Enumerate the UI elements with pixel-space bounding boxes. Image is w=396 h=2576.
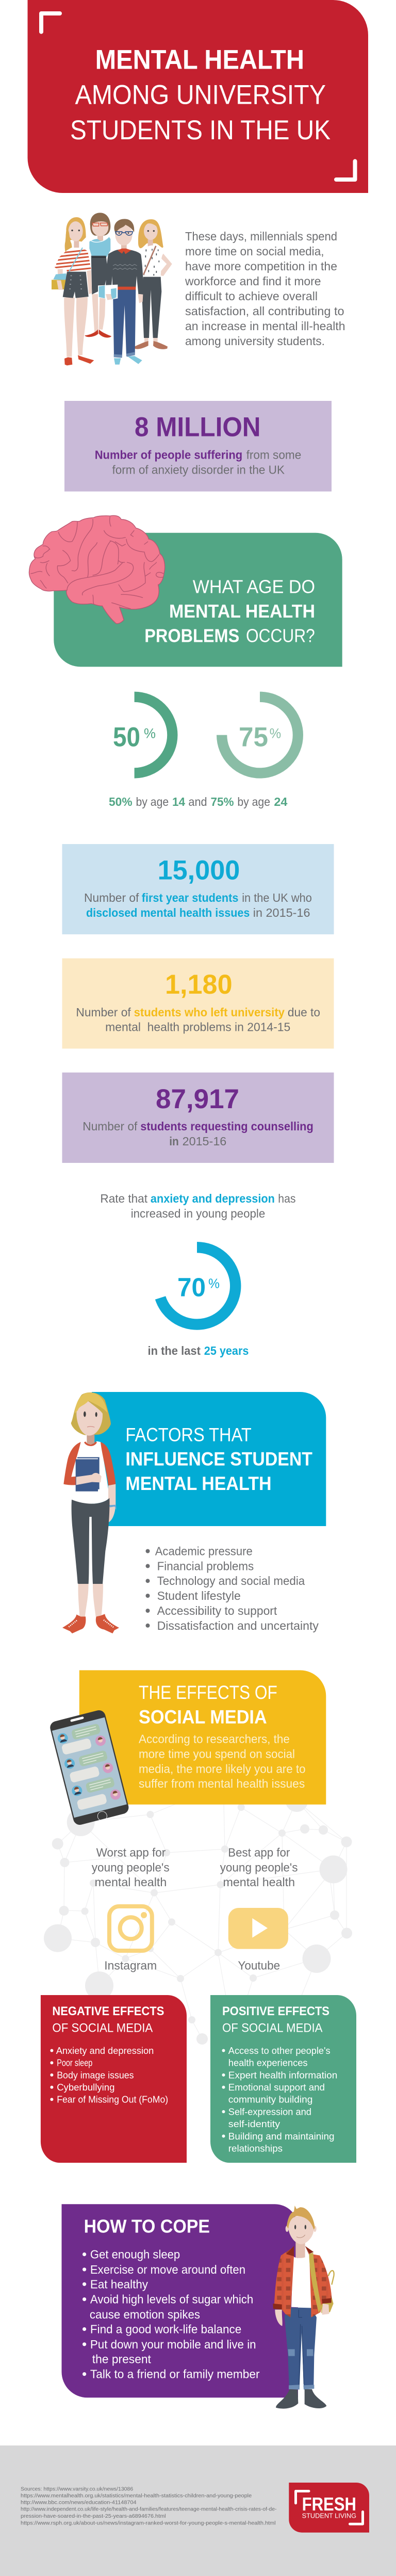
icon: brain xyxy=(29,515,165,624)
stat panel: 15,000: disclosed mental health issues xyxy=(86,906,250,919)
heading: OCCUR? xyxy=(246,625,315,646)
panel: positive effects of social media: self-identity xyxy=(228,2118,280,2129)
text: rate of anxiety and depression: has xyxy=(278,1192,296,1205)
panel: what age do mental health problems occur xyxy=(54,533,342,667)
panel: factors that influence student mental health xyxy=(92,1392,326,1526)
list: factors: Accessibility to support xyxy=(157,1604,277,1617)
worst app column xyxy=(92,1846,170,1972)
logo: fresh student living xyxy=(289,2483,369,2533)
panel: positive effects of social media: health experiences xyxy=(228,2057,308,2068)
sources text: https://www.mentalhealth.org.uk/statistics/mental-health-statistics-children-and-young-people xyxy=(21,2492,252,2499)
stat panel: 8 million: from some xyxy=(246,448,301,461)
stat panel: 15,000: first year students xyxy=(142,891,238,904)
instagram label: Instagram xyxy=(104,1958,157,1972)
sources text: Sources: https://www.varsity.co.uk/news/13086 xyxy=(21,2486,133,2492)
sources text: http://www.independent.co.uk/life-style/health-and-families/features/teenage-mental-health-crisis-rates-of-de- xyxy=(21,2506,277,2513)
stat panel: 15,000: 15,000 xyxy=(158,855,240,885)
panel: positive effects of social media: relationships xyxy=(228,2143,283,2153)
stat panel: 15,000 xyxy=(62,844,334,934)
stat panel: 87,917: 2015-16 xyxy=(183,1135,226,1148)
panel: positive effects of social media: Expert health information xyxy=(228,2069,337,2080)
logo: fresh student living: STUDENT LIVING xyxy=(302,2512,356,2520)
panel: the effects of social media: SOCIAL MEDIA xyxy=(139,1706,267,1727)
panel: how to cope: Get enough sleep xyxy=(90,2247,180,2261)
panel: positive effects of social media: Emotional support and xyxy=(228,2082,325,2093)
stat panel: 15,000: in the UK who xyxy=(242,891,312,904)
intro paragraph: among university students. xyxy=(185,334,325,348)
footer band xyxy=(0,2445,396,2576)
panel: the effects of social media: THE EFFECTS OF xyxy=(139,1682,277,1703)
stat panel: 87,917: 87,917 xyxy=(156,1084,239,1114)
panel: positive effects of social media: community building xyxy=(228,2094,312,2105)
sources text xyxy=(21,2486,277,2526)
stat panel: 8 million xyxy=(64,401,332,492)
title text: MENTAL HEALTH xyxy=(95,44,304,75)
panel: how to cope: cause emotion spikes xyxy=(90,2308,200,2321)
sources text: https://www.rsph.org.uk/about-us/news/instagram-ranked-worst-for-young-people-s-mental-health.html xyxy=(21,2520,276,2526)
worst app text: mental health xyxy=(95,1875,167,1889)
panel: how to cope: Avoid high levels of sugar which xyxy=(90,2293,253,2306)
effects paragraph: suffer from mental health issues xyxy=(139,1777,305,1790)
stat panel: 8 million: 8 MILLION xyxy=(135,412,261,443)
text: in the last 25 years xyxy=(147,1344,249,1357)
list: factors: Technology and social media xyxy=(157,1574,305,1587)
panel: negative effects of social media xyxy=(41,1995,187,2163)
worst app text: Worst app for xyxy=(96,1846,166,1859)
sources text: http://www.bbc.com/news/education-41148704 xyxy=(21,2500,137,2506)
best app text: young people's xyxy=(220,1860,298,1874)
panel: negative effects of social media: Anxiety and depression xyxy=(56,2045,154,2056)
stat panel: 87,917: in xyxy=(169,1135,179,1148)
donut chart: 75 percent: % xyxy=(270,726,281,741)
stat panel: 15,000: in 2015-16 xyxy=(253,906,310,919)
panel: positive effects of social media: POSITIVE EFFECTS xyxy=(222,2004,329,2018)
best app column xyxy=(220,1846,298,1972)
stat panel: 87,917 xyxy=(62,1073,334,1163)
illustration: student with book xyxy=(62,1392,119,1633)
icon: smartphone with chat xyxy=(49,1709,130,1828)
stat panel: 8 million: Number of people suffering xyxy=(95,448,242,461)
donut caption: by age xyxy=(237,795,270,808)
logo: fresh student living: FRESH xyxy=(302,2493,356,2515)
donut caption xyxy=(109,795,288,808)
donut chart: 50 percent: % xyxy=(144,726,156,741)
background network pattern xyxy=(44,1789,352,2045)
stat panel: 1,180: 1,180 xyxy=(165,969,233,1000)
title text: STUDENTS IN THE UK xyxy=(70,115,331,145)
heading: MENTAL HEALTH xyxy=(169,601,315,622)
stat panel: 87,917: students requesting counselling xyxy=(140,1120,314,1133)
donut chart: 75 percent xyxy=(222,697,298,773)
text: in the last 25 years: in the last xyxy=(147,1344,201,1357)
icon: instagram xyxy=(109,1906,152,1951)
intro paragraph: more time on social media, xyxy=(185,245,324,258)
donut chart: 75 percent: 75 xyxy=(239,722,268,753)
panel: factors that influence student mental health: MENTAL HEALTH xyxy=(125,1473,271,1494)
text: rate of anxiety and depression xyxy=(100,1192,296,1220)
panel: how to cope: Find a good work-life balance xyxy=(90,2323,241,2336)
donut caption: 14 xyxy=(172,795,185,808)
text: in the last 25 years: 25 years xyxy=(204,1344,249,1357)
sources text: pression-have-soared-in-the-past-25-years-a6894676.html xyxy=(21,2513,166,2519)
panel: negative effects of social media: NEGATIVE EFFECTS xyxy=(52,2004,164,2018)
effects paragraph: According to researchers, the xyxy=(139,1732,290,1746)
stat panel: 1,180 xyxy=(62,959,334,1048)
heading: WHAT AGE DO xyxy=(193,576,315,597)
intro paragraph xyxy=(185,230,345,348)
panel: positive effects of social media: Self-expression and xyxy=(228,2106,311,2117)
panel: negative effects of social media: Cyberbullying xyxy=(57,2082,114,2093)
intro paragraph: These days, millennials spend xyxy=(185,230,337,243)
icon: top-left bracket xyxy=(41,13,60,32)
panel: the effects of social media xyxy=(79,1670,326,1805)
panel: positive effects of social media xyxy=(210,1995,356,2163)
intro paragraph: workforce and find it more xyxy=(185,274,321,288)
panel: negative effects of social media: OF SOCIAL MEDIA xyxy=(52,2021,153,2035)
stat panel: 1,180: due to xyxy=(288,1006,320,1019)
best app text xyxy=(220,1846,298,1889)
donut chart: 70 percent xyxy=(160,1248,236,1324)
list: factors: Academic pressure xyxy=(155,1545,253,1558)
panel: positive effects of social media: OF SOCIAL MEDIA xyxy=(222,2021,323,2035)
stat panel: 1,180: mental health problems in 2014-15 xyxy=(105,1020,290,1034)
panel: how to cope: Exercise or move around often xyxy=(90,2263,245,2276)
panel: how to cope xyxy=(62,2204,298,2397)
donut chart: 70 percent: 70 xyxy=(177,1273,206,1302)
stat panel: 1,180: students who left university xyxy=(134,1006,285,1019)
panel: positive effects of social media: Access to other people's xyxy=(228,2045,331,2056)
donut caption: and xyxy=(188,795,207,808)
worst app text: young people's xyxy=(92,1860,170,1874)
panel: how to cope: Talk to a friend or family member xyxy=(90,2368,260,2381)
icon: youtube xyxy=(228,1908,288,1949)
worst app text xyxy=(92,1846,170,1889)
panel: negative effects of social media: Poor sleep xyxy=(57,2057,92,2068)
heading xyxy=(144,576,315,646)
donut chart: 70 percent: % xyxy=(208,1276,220,1291)
effects paragraph xyxy=(139,1732,306,1790)
panel: positive effects of social media: Building and maintaining xyxy=(228,2131,334,2142)
girl with brown hair xyxy=(85,213,111,337)
stat panel: 87,917: Number of xyxy=(82,1120,138,1133)
title text: AMONG UNIVERSITY xyxy=(75,79,326,110)
donut chart: 50 percent xyxy=(113,697,172,773)
panel: factors that influence student mental health: INFLUENCE STUDENT xyxy=(125,1448,312,1469)
list: factors xyxy=(145,1545,319,1632)
stat panel: 15,000: Number of xyxy=(84,891,139,904)
youtube label: Youtube xyxy=(238,1958,280,1972)
list: factors: Financial problems xyxy=(157,1559,254,1573)
effects paragraph: media, the more likely you are to xyxy=(139,1762,306,1775)
best app text: Best app for xyxy=(228,1846,290,1859)
illustration: male student with backpack xyxy=(273,2206,334,2409)
donut caption: 24 xyxy=(274,795,288,808)
illustration: four students xyxy=(52,213,172,365)
donut caption: 75% xyxy=(210,795,234,808)
title banner xyxy=(28,0,368,193)
panel: negative effects of social media: Fear of Missing Out (FoMo) xyxy=(57,2094,168,2105)
list: factors: Student lifestyle xyxy=(157,1589,241,1602)
panel: factors that influence student mental health: FACTORS THAT xyxy=(125,1424,252,1446)
effects paragraph: more time you spend on social xyxy=(139,1747,295,1760)
intro paragraph: difficult to achieve overall xyxy=(185,289,318,303)
donut chart: 50 percent: 50 xyxy=(113,722,140,753)
heading: PROBLEMS xyxy=(144,625,239,646)
intro paragraph: satisfaction, all contributing to xyxy=(185,304,344,318)
donut caption: by age xyxy=(136,795,169,808)
panel: how to cope: HOW TO COPE xyxy=(84,2215,210,2237)
list: factors: Dissatisfaction and uncertainty xyxy=(157,1619,319,1632)
stat panel: 1,180: Number of xyxy=(76,1006,131,1019)
panel: negative effects of social media: Body image issues xyxy=(57,2069,134,2080)
intro paragraph: have more competition in the xyxy=(185,260,337,273)
panel: how to cope: the present xyxy=(92,2352,152,2366)
text: rate of anxiety and depression: Rate that xyxy=(100,1192,148,1205)
girl with blonde wavy hair xyxy=(135,219,172,349)
panel: how to cope: Eat healthy xyxy=(90,2277,148,2291)
text: rate of anxiety and depression: increased in young people xyxy=(131,1207,265,1220)
panel: how to cope: Put down your mobile and live in xyxy=(90,2338,256,2351)
icon: bottom-right bracket xyxy=(336,161,355,180)
intro paragraph: an increase in mental ill-health xyxy=(185,319,345,333)
boy with glasses xyxy=(98,219,143,365)
best app text: mental health xyxy=(223,1875,295,1889)
stat panel: 8 million: form of anxiety disorder in the UK xyxy=(112,463,285,476)
donut caption: 50% xyxy=(109,795,133,808)
girl in striped top xyxy=(52,217,94,365)
title text xyxy=(70,44,331,145)
text: rate of anxiety and depression: anxiety and depression xyxy=(151,1192,275,1205)
